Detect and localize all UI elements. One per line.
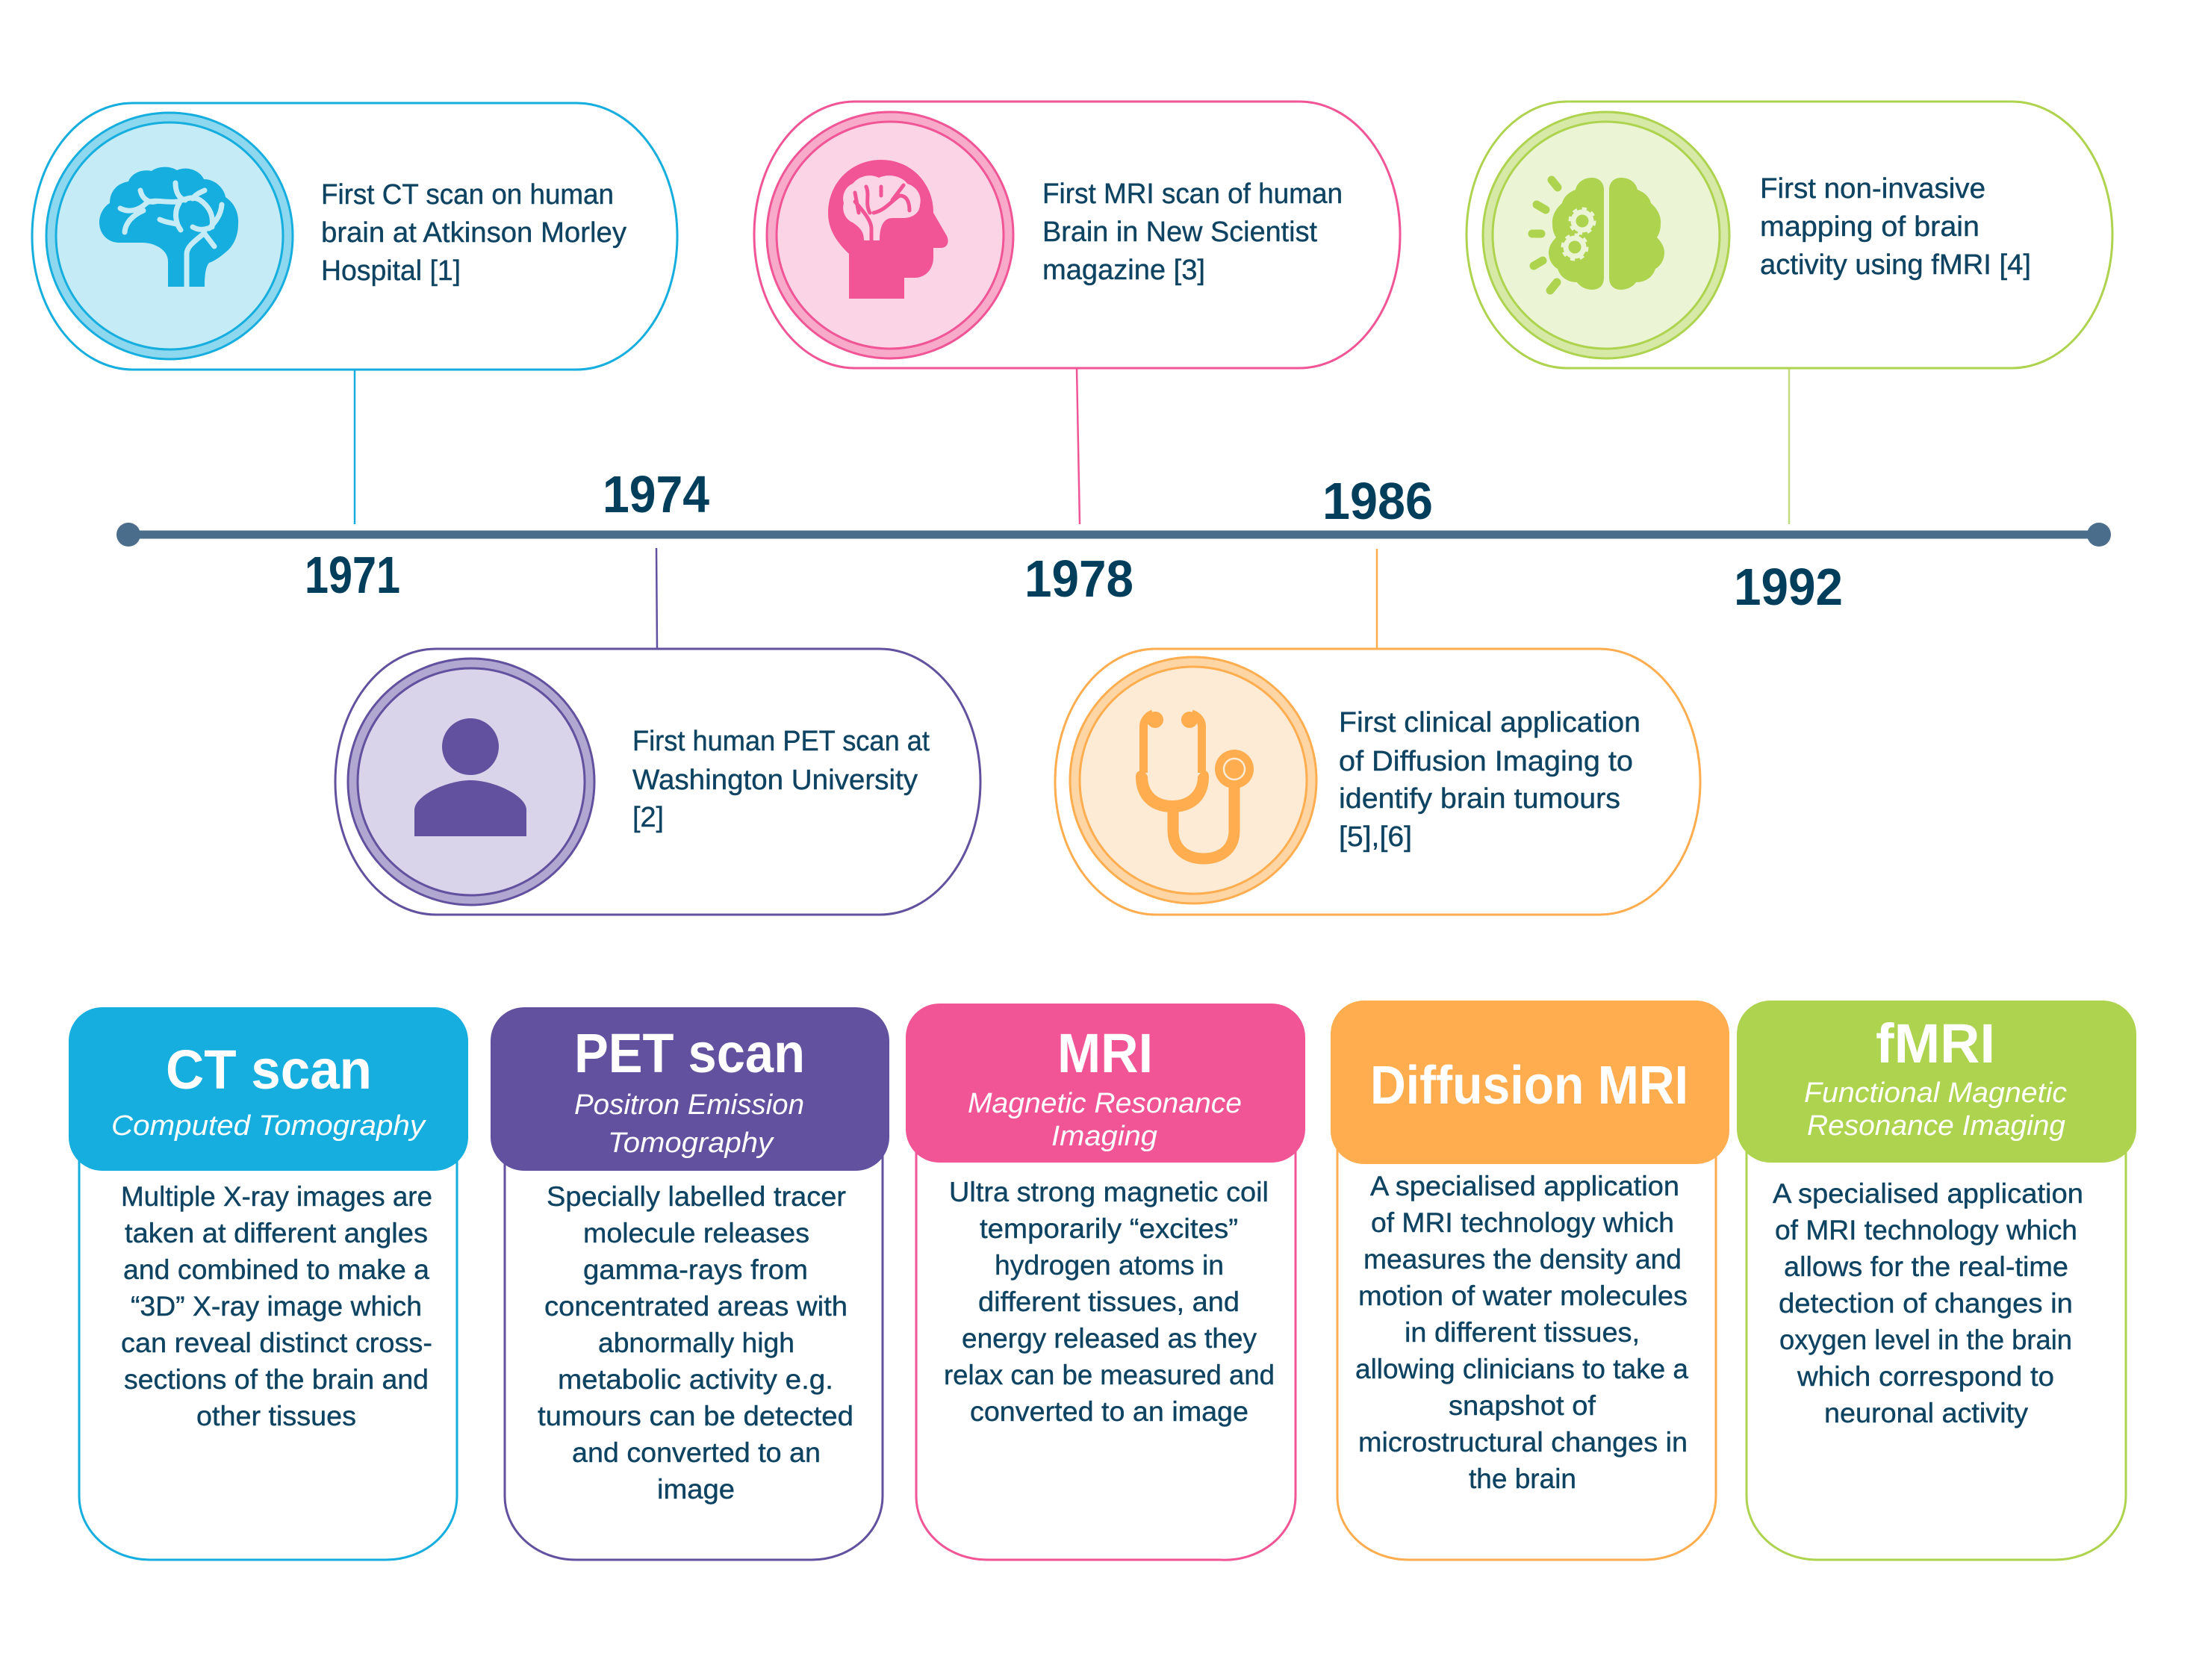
text: 1992 description (1760, 173, 2031, 281)
text: Diffusion MRI description: allowing clinicians to take a (1355, 1354, 1688, 1384)
text: Diffusion MRI description: snapshot of (1449, 1390, 1596, 1421)
text: MRI description (944, 1177, 1275, 1427)
header: Diffusion MRI: Diffusion MRI (1370, 1056, 1688, 1116)
text: MRI description: Ultra strong magnetic coil (949, 1177, 1269, 1207)
text: Diffusion MRI description: in different tissues, (1405, 1317, 1640, 1348)
text: 1986 description: identify brain tumours (1339, 783, 1620, 815)
text: fMRI description (1773, 1178, 2083, 1428)
icon: stethoscope (1136, 712, 1254, 859)
connector: 1974 (656, 548, 657, 649)
icon: head with brain (828, 160, 948, 299)
panel: PET scan card (491, 1007, 889, 1560)
header: fMRI: Resonance Imaging (1807, 1110, 2065, 1142)
header: MRI: MRI (1057, 1022, 1153, 1084)
panel: 1971 CT milestone (32, 103, 677, 370)
text: 1978 description: magazine [3] (1042, 255, 1205, 286)
header: MRI: Imaging (1051, 1121, 1157, 1152)
text: CT scan description (121, 1181, 432, 1431)
panel: MRI card (906, 1004, 1305, 1560)
text: PET scan description: Specially labelled tracer (547, 1181, 846, 1212)
header: PET scan: Tomography (608, 1127, 774, 1159)
text: 1986 description (1339, 707, 1640, 853)
text: CT scan description: taken at different angles (125, 1218, 428, 1248)
text: MRI description: hydrogen atoms in (995, 1250, 1224, 1281)
text: PET scan description: tumours can be detected (538, 1401, 853, 1431)
text: MRI description: different tissues, and (978, 1287, 1240, 1317)
header: PET scan: PET scan (574, 1022, 805, 1084)
text: PET scan description (538, 1181, 853, 1505)
panel: Diffusion MRI card (1331, 1001, 1729, 1560)
text: 1971 description: brain at Atkinson Morley (321, 217, 626, 249)
text: PET scan description: and converted to an (572, 1437, 821, 1468)
year: 1986: 1986 (1322, 472, 1433, 530)
text: Diffusion MRI description: the brain (1469, 1463, 1576, 1494)
text: Diffusion MRI description: measures the density and (1363, 1244, 1682, 1275)
icon: brain (99, 167, 238, 288)
header: Diffusion MRI (1331, 1001, 1729, 1164)
connector: 1971 (354, 370, 355, 524)
text: MRI description: energy released as they (962, 1323, 1257, 1354)
text: Diffusion MRI description: motion of water molecules (1358, 1281, 1688, 1311)
icon: person (414, 718, 526, 836)
text: 1986 description: First clinical application (1339, 707, 1640, 738)
text: MRI description: relax can be measured and (944, 1360, 1275, 1390)
connector: 1992 (1788, 368, 1790, 524)
header: MRI (906, 1004, 1305, 1163)
text: 1992 description: activity using fMRI [4] (1760, 249, 2031, 281)
icon: brain with gears (1532, 178, 1664, 290)
header: fMRI: Functional Magnetic (1804, 1077, 2067, 1109)
text: PET scan description: metabolic activity e.g. (558, 1364, 833, 1395)
header: fMRI (1737, 1001, 2136, 1163)
text: CT scan description: Multiple X-ray images are (121, 1181, 432, 1212)
text: CT scan description: “3D” X-ray image which (131, 1291, 422, 1322)
text: PET scan description: gamma-rays from (583, 1254, 808, 1285)
text: fMRI description: neuronal activity (1824, 1398, 2028, 1428)
text: 1974 description (632, 726, 930, 833)
text: Diffusion MRI description: of MRI technology which (1371, 1207, 1674, 1238)
text: 1986 description: [5],[6] (1339, 821, 1412, 853)
text: 1971 description: First CT scan on human (321, 179, 614, 211)
text: fMRI description: oxygen level in the brain (1779, 1325, 2072, 1355)
text: Diffusion MRI description (1355, 1171, 1688, 1494)
year: 1992: 1992 (1734, 558, 1843, 616)
header: CT scan: CT scan (166, 1039, 372, 1101)
text: 1971 description: Hospital [1] (321, 255, 461, 287)
panel: 1974 PET milestone (335, 649, 980, 915)
panel: 1986 diffusion milestone (1055, 649, 1700, 915)
text: 1986 description: of Diffusion Imaging to (1339, 746, 1633, 777)
year: 1971: 1971 (305, 546, 400, 604)
connector: 1978 (1077, 368, 1080, 524)
text: 1992 description: First non-invasive (1760, 173, 1985, 205)
text: 1992 description: mapping of brain (1760, 211, 1979, 243)
connector: 1986 (1376, 549, 1378, 649)
text: 1974 description: Washington University (632, 765, 918, 796)
text: PET scan description: molecule releases (583, 1218, 809, 1248)
text: 1974 description: First human PET scan at (632, 726, 930, 757)
text: MRI description: temporarily “excites” (980, 1213, 1238, 1244)
header: fMRI: fMRI (1876, 1012, 1995, 1074)
text: 1974 description: [2] (632, 802, 664, 833)
header: CT scan: Computed Tomography (111, 1110, 426, 1142)
panel: 1992 fMRI milestone (1467, 102, 2112, 368)
text: fMRI description: A specialised application (1773, 1178, 2083, 1209)
timeline axis (116, 523, 2111, 547)
text: fMRI description: allows for the real-time (1784, 1251, 2068, 1282)
text: fMRI description: of MRI technology which (1775, 1215, 2077, 1245)
year: 1978: 1978 (1024, 550, 1133, 608)
panel: CT scan card (69, 1007, 468, 1560)
header: PET scan (491, 1007, 889, 1171)
text: fMRI description: detection of changes in (1779, 1288, 2073, 1319)
text: fMRI description: which correspond to (1797, 1361, 2054, 1392)
text: Diffusion MRI description: microstructural changes in (1358, 1427, 1688, 1457)
text: 1978 description (1042, 178, 1343, 286)
text: CT scan description: sections of the brain and (124, 1364, 429, 1395)
text: 1978 description: First MRI scan of human (1042, 178, 1343, 210)
text: MRI description: converted to an image (970, 1396, 1248, 1427)
panel: 1978 MRI milestone (754, 102, 1400, 368)
text: 1978 description: Brain in New Scientist (1042, 217, 1317, 248)
text: CT scan description: can reveal distinct cross- (121, 1328, 432, 1358)
text: PET scan description: image (657, 1474, 735, 1505)
text: CT scan description: and combined to make a (123, 1254, 429, 1285)
header: PET scan: Positron Emission (574, 1089, 804, 1121)
text: CT scan description: other tissues (196, 1401, 356, 1431)
panel: fMRI card (1737, 1001, 2136, 1560)
text: PET scan description: abnormally high (598, 1328, 794, 1358)
text: 1971 description (321, 179, 626, 287)
header: MRI: Magnetic Resonance (968, 1088, 1242, 1119)
text: PET scan description: concentrated areas with (544, 1291, 848, 1322)
year: 1974: 1974 (603, 465, 709, 523)
text: Diffusion MRI description: A specialised application (1370, 1171, 1679, 1201)
header: CT scan (69, 1007, 468, 1171)
